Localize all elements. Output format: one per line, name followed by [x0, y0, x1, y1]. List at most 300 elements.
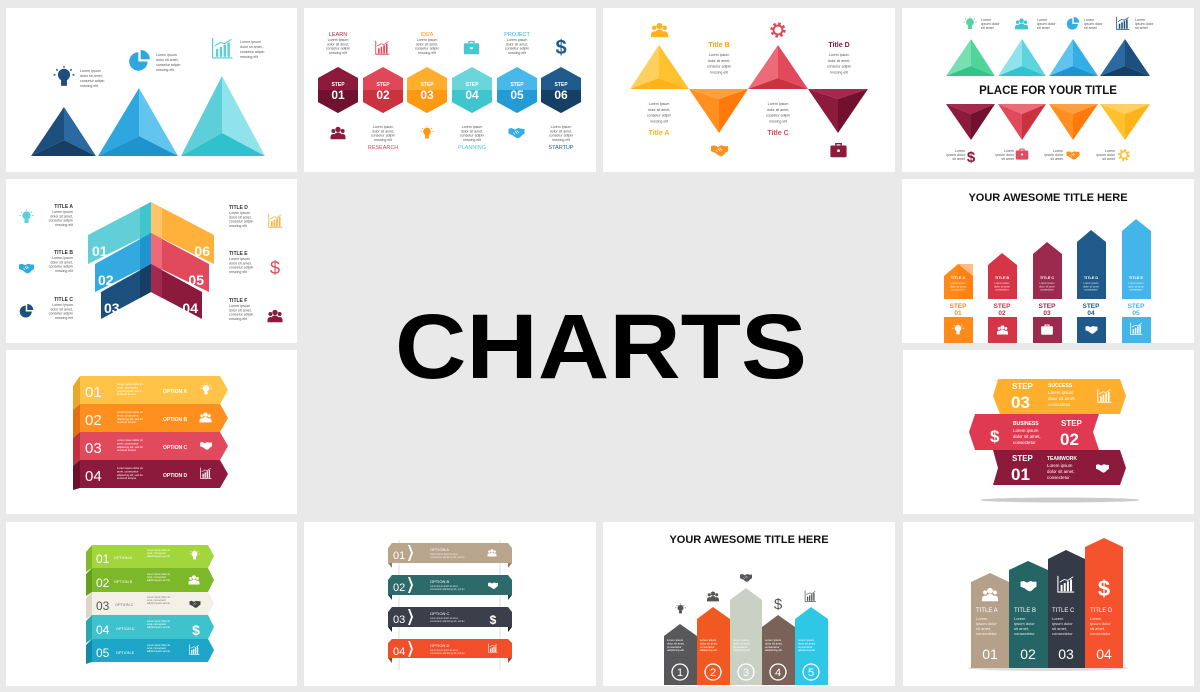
hexagon row: 04	[465, 88, 479, 102]
step labels: 03	[1043, 310, 1051, 317]
option 05	[86, 639, 214, 664]
right titles: dolor sit amet,	[229, 261, 252, 265]
top labels: nnscing elit	[508, 51, 526, 55]
icons: $	[270, 258, 280, 278]
band 03: OPTION C	[163, 445, 188, 451]
ribbon 02: $	[990, 427, 1000, 446]
text: chart caption: dolor sit amet,	[240, 45, 263, 49]
arrows: consectetur	[798, 645, 813, 649]
bottom labels	[368, 125, 574, 151]
panel: green options 01-05: adipiscing elit, sed do	[147, 555, 171, 558]
top icons row: ipsum dolor	[1135, 22, 1154, 26]
text: chart caption: consetur adipin	[240, 50, 264, 54]
top labels: PROJECT	[504, 32, 530, 38]
panel: ribbon options A-D: consectetur adipiscing elit, sed do	[430, 588, 465, 591]
band 01: 01	[85, 384, 102, 401]
hexagon row: STEP	[420, 82, 434, 88]
panel: green options 01-05: amet, consectetur	[147, 647, 166, 650]
arrows: 1	[677, 667, 683, 679]
chevron right	[151, 202, 214, 319]
triangle B	[689, 89, 748, 133]
title: YOUR AWESOME TITLE HERE	[968, 192, 1128, 204]
labels: Title C	[767, 130, 789, 137]
top icons row: ipsum dolor	[1084, 22, 1103, 26]
column 03: 03	[1058, 646, 1074, 662]
arrows: dolor sit amet	[1128, 284, 1144, 288]
arrows: TITLE C	[1040, 276, 1054, 280]
band 02: eiusmod tempor	[117, 420, 136, 424]
left titles: nnscing elit	[55, 269, 73, 273]
bottom icons row: Lorem	[1053, 149, 1063, 153]
chevron left	[88, 202, 151, 319]
band 02: OPTION B	[163, 417, 188, 423]
panel: green options 01-05: Lorem ipsum dolor sit	[147, 549, 170, 552]
bottom icons row: Lorem	[955, 149, 965, 153]
arrows: consectetur	[667, 645, 682, 649]
column 04: TITLE D	[1090, 608, 1113, 614]
column 02: TITLE B	[1014, 608, 1036, 614]
arrows: dolor sit amet,	[700, 641, 718, 645]
ribbon 04	[388, 639, 512, 663]
bottom labels: RESEARCH	[368, 145, 398, 151]
left titles: consetur adipin	[49, 312, 73, 316]
bottom icons row: ipsum dolor	[1096, 153, 1116, 157]
ribbon 03: 03	[393, 614, 405, 626]
top labels: LEARN	[329, 32, 347, 38]
chevron right: 05	[188, 272, 204, 288]
column 04: ipsum dolor	[1090, 621, 1111, 626]
bottom icons row	[946, 149, 1129, 166]
hexagon row: STEP	[331, 82, 345, 88]
panel: title columns 01-04	[903, 522, 1194, 686]
bottom labels: consetur adipin	[549, 134, 573, 138]
pyramid 1	[31, 107, 96, 156]
chevron right: 04	[182, 300, 198, 316]
text: pie caption: consetur adipin	[156, 63, 180, 67]
arrows: Lorem ipsum	[950, 281, 966, 285]
arrows: Lorem ipsum	[1084, 281, 1098, 285]
bottom labels: Lorem ipsum	[373, 125, 393, 129]
panel: green options 01-05: amet, consectetur	[147, 552, 166, 555]
ribbon 02: OPTION B	[430, 579, 449, 584]
right titles: Lorem ipsum	[229, 211, 250, 215]
top icons row	[963, 16, 1154, 30]
arrows: dolor sit amet,	[667, 641, 685, 645]
panel: stacked options A-D	[6, 350, 297, 514]
panel: zigzag triangles	[603, 8, 895, 172]
option 03: 03	[96, 599, 110, 613]
column 03: ipsum dolor	[1052, 621, 1073, 626]
lorem texts: dolor sit amet,	[708, 59, 730, 63]
ribbon 01: consectetur	[1047, 475, 1070, 480]
right titles: TITLE E	[229, 251, 248, 257]
arrows: dolor sit amet,	[733, 641, 751, 645]
column 01: Lorem	[976, 616, 988, 621]
lorem texts: Lorem ipsum	[829, 53, 849, 57]
ribbon 02: STEP	[1061, 419, 1083, 428]
vertical lines	[399, 540, 500, 670]
band 02: amet, consectetur	[117, 413, 138, 417]
band 03: eiusmod tempor	[117, 448, 136, 452]
top labels: Lorem ipsum	[507, 38, 527, 42]
arrows: 5	[808, 667, 814, 679]
bottom icons row: sit amet	[1102, 157, 1115, 161]
arrows: dolor sit amet,	[765, 641, 783, 645]
icon: pie	[129, 50, 150, 71]
arrows: consectetur	[995, 288, 1009, 292]
column 03	[1048, 550, 1085, 668]
top labels: nnscing elit	[418, 51, 436, 55]
option 04: 04	[96, 623, 110, 637]
ribbon 02	[969, 414, 1099, 450]
column 01: consectetur	[976, 631, 997, 636]
band 01: amet, consectetur	[117, 385, 138, 389]
column 01: TITLE A	[976, 608, 998, 614]
panel: green options 01-05: adipiscing elit, sed do	[147, 626, 171, 629]
band 02	[73, 404, 228, 438]
band 01	[73, 376, 228, 410]
ribbon 03: 03	[1011, 393, 1030, 412]
arrows: dolor sit amet	[994, 284, 1010, 288]
ribbon 01: Lorem ipsum	[1047, 463, 1073, 468]
text: pie caption: Lorem ipsum	[156, 53, 177, 57]
column 01: ipsum dolor	[976, 621, 997, 626]
bottom icons row: ipsum dolor	[946, 153, 966, 157]
triangle A	[630, 45, 689, 89]
arrows	[944, 219, 1151, 299]
ribbon 04: OPTION D	[430, 643, 449, 648]
arrows: adipiscing elit	[667, 648, 684, 652]
right titles: TITLE D	[229, 205, 248, 211]
chevron left: 03	[104, 300, 120, 316]
arrows: Lorem ipsum	[765, 638, 782, 642]
bottom icons row: Lorem	[1004, 149, 1014, 153]
text: pie caption: nnscing elit	[156, 68, 174, 72]
panel: ribbon options A-D: consectetur adipiscing elit, sed do	[430, 652, 465, 655]
title: PLACE FOR YOUR TITLE	[979, 85, 1117, 97]
top labels: Lorem ipsum	[417, 38, 437, 42]
band 02: Lorem ipsum dolor sit	[117, 410, 143, 414]
bottom labels: PLANNING	[458, 145, 486, 151]
pyramid 2	[98, 88, 178, 156]
band 03: Lorem ipsum dolor sit	[117, 438, 143, 442]
arrows: consectetur	[1084, 288, 1098, 292]
arrows	[664, 588, 828, 685]
arrows: dolor sit amet,	[798, 641, 816, 645]
icons above: $	[774, 596, 783, 613]
bottom labels: consetur adipin	[371, 134, 395, 138]
ribbon 02: Lorem ipsum	[1013, 428, 1039, 433]
panel: ribbon options A-D: consectetur adipiscing elit, sed do	[430, 620, 465, 623]
text: bulb caption: Lorem ipsum	[80, 69, 101, 73]
shadow	[968, 665, 1128, 671]
arrows: consectetur	[733, 645, 748, 649]
chevron left: 02	[98, 272, 114, 288]
column 03: sit amet,	[1052, 626, 1067, 631]
step labels: STEP	[1128, 303, 1145, 310]
panel: pyramids	[6, 8, 297, 172]
right titles: consetur adipin	[229, 220, 253, 224]
left titles: TITLE A	[54, 204, 73, 210]
ribbon 03: dolor sit amet,	[1048, 396, 1076, 401]
arrows: 2	[710, 667, 716, 679]
title: YOUR AWESOME TITLE HERE	[669, 534, 829, 546]
top labels: dolor sit amet,	[416, 42, 438, 46]
step labels: 04	[1087, 310, 1095, 317]
panel: ribbon options A-D: Lorem ipsum dolor sit amet,	[430, 553, 459, 556]
top labels: IDEA	[421, 32, 434, 38]
lorem texts: dolor sit amet,	[767, 108, 789, 112]
ribbon 03	[993, 379, 1126, 414]
ribbon 02: consectetur	[1013, 440, 1036, 445]
column 03: Lorem	[1052, 616, 1064, 621]
text: chart caption: Lorem ipsum	[240, 40, 261, 44]
top labels: consetur adipin	[505, 47, 529, 51]
step labels	[950, 303, 1145, 317]
panel: hexagon steps	[304, 8, 596, 172]
left titles: Lorem ipsum	[52, 256, 73, 260]
right titles: TITLE F	[229, 298, 247, 304]
option 01: 01	[96, 552, 110, 566]
panel: green options 01-05: adipiscing elit, sed do	[147, 650, 171, 653]
column 03: TITLE C	[1052, 608, 1075, 614]
text: bulb caption: consetur adipin	[80, 79, 104, 83]
top icons row: ipsum dolor	[1037, 22, 1056, 26]
ribbon 02: 02	[393, 582, 405, 594]
arrows: 3	[743, 667, 749, 679]
option 02	[86, 568, 214, 596]
arrows: Lorem ipsum	[994, 281, 1010, 285]
lorem texts: Lorem ipsum	[709, 53, 729, 57]
column 04: $	[1098, 576, 1110, 601]
bottom labels: nnscing elit	[374, 138, 392, 142]
panel: ribbon options A-D: Lorem ipsum dolor sit amet,	[430, 649, 459, 652]
text: bulb caption: dolor sit amet,	[80, 74, 103, 78]
ribbon 03: STEP	[1012, 382, 1034, 391]
arrows: Lorem ipsum	[798, 638, 815, 642]
ribbon 04: 04	[393, 646, 405, 658]
icon: chart	[213, 38, 232, 58]
arrows: consectetur	[1129, 288, 1143, 292]
top labels: Lorem ipsum	[328, 38, 348, 42]
arrows: Lorem ipsum	[667, 638, 684, 642]
labels: Title B	[708, 42, 730, 49]
top icons	[376, 37, 567, 59]
arrows: TITLE E	[1129, 276, 1144, 280]
panel: green options 01-05: adipiscing elit, sed do	[147, 579, 171, 582]
band 02: adipiscing elit, sed do	[117, 417, 143, 421]
hexagon row: 05	[510, 88, 524, 102]
right titles: Lorem ipsum	[229, 257, 250, 261]
top labels: dolor sit amet,	[506, 42, 528, 46]
labels: Title D	[828, 42, 850, 49]
panel: ribbon options A-D: Lorem ipsum dolor sit amet,	[430, 617, 459, 620]
arrows: adipiscing elit	[733, 648, 750, 652]
band 01: eiusmod tempor	[117, 392, 136, 396]
arrows: Lorem ipsum	[1128, 281, 1144, 285]
arrows: consectetur	[700, 645, 715, 649]
top icons row: sit amet	[1037, 26, 1050, 30]
step labels: 05	[1132, 310, 1140, 317]
panel: green options 01-05: Lorem ipsum dolor sit	[147, 644, 170, 647]
option 02: OPTION B	[114, 580, 133, 584]
arrows: consectetur	[765, 645, 780, 649]
left titles: dolor sit amet,	[50, 214, 73, 218]
option 03	[86, 592, 214, 619]
lorem texts: Lorem ipsum	[768, 102, 788, 106]
right titles: dolor sit amet,	[229, 215, 252, 219]
left titles: Lorem ipsum	[52, 210, 73, 214]
lorem texts	[647, 53, 851, 123]
right titles: Lorem ipsum	[229, 304, 250, 308]
ribbon 01	[388, 543, 512, 568]
band 04: Lorem ipsum dolor sit	[117, 466, 143, 470]
band 04: amet, consectetur	[117, 469, 138, 473]
step labels: STEP	[1039, 303, 1056, 310]
panel: step arrows chart	[902, 179, 1194, 343]
triangle C	[748, 45, 808, 89]
band 03: 03	[85, 440, 102, 457]
chevron left: 01	[92, 243, 108, 259]
bottom labels: dolor sit amet,	[550, 129, 572, 133]
bottom labels: nnscing elit	[552, 138, 570, 142]
panel: green options 01-05: Lorem ipsum dolor sit	[147, 573, 170, 576]
icons	[19, 210, 282, 322]
right titles	[229, 205, 253, 321]
column 04	[1085, 538, 1123, 668]
step labels: STEP	[994, 303, 1011, 310]
ribbon 01: STEP	[1012, 454, 1034, 463]
ribbon 02: 02	[1060, 430, 1079, 449]
ribbon 01	[993, 450, 1126, 485]
panel: ribbon options A-D: Lorem ipsum dolor sit amet,	[430, 585, 459, 588]
right titles: consetur adipin	[229, 313, 253, 317]
option 04: $	[192, 622, 200, 638]
top icons row: Lorem	[1135, 18, 1145, 22]
ribbon 03: Lorem ipsum	[1048, 390, 1074, 395]
panel: place for your title	[902, 8, 1194, 172]
ribbon 03: consectetur	[1048, 402, 1071, 407]
band 04: 04	[85, 468, 102, 485]
option 04: OPTION D	[116, 627, 135, 631]
option 01	[86, 545, 214, 572]
step labels: 02	[998, 310, 1006, 317]
bottom icons row: $	[967, 149, 976, 166]
top labels: consetur adipin	[415, 47, 439, 51]
panel: numbered arrows 1-5	[603, 522, 895, 686]
panel: green options 01-05: Lorem ipsum dolor sit	[147, 620, 170, 623]
ribbon 03	[388, 607, 512, 632]
bottom icons row: ipsum dolor	[1044, 153, 1064, 157]
shadow	[980, 498, 1140, 502]
hexagon row: STEP	[510, 82, 524, 88]
arrows: TITLE B	[995, 276, 1009, 280]
hexagon row: STEP	[554, 82, 568, 88]
lorem texts: consetur adipin	[827, 65, 851, 69]
band 04: adipiscing elit, sed do	[117, 473, 143, 477]
option 02: 02	[96, 576, 110, 590]
arrows: adipiscing elit	[798, 648, 815, 652]
text: bulb caption: nnscing elit	[80, 84, 98, 88]
arrows: TITLE A	[951, 276, 965, 280]
left titles: nnscing elit	[55, 223, 73, 227]
band 01: OPTION A	[163, 389, 187, 395]
left titles: nnscing elit	[55, 316, 73, 320]
option 05: OPTION E	[116, 651, 135, 655]
option 03: OPTION C	[115, 603, 134, 607]
bottom labels: dolor sit amet,	[461, 129, 483, 133]
lorem texts: nnscing elit	[710, 70, 728, 74]
column 04: sit amet,	[1090, 626, 1105, 631]
arrows: Lorem ipsum	[733, 638, 750, 642]
column 01: sit amet,	[976, 626, 991, 631]
lorem texts: dolor sit amet,	[648, 108, 670, 112]
hexagon row: STEP	[376, 82, 390, 88]
panel: green options 01-05	[6, 522, 297, 686]
bottom icons	[330, 126, 524, 139]
step labels: STEP	[1083, 303, 1100, 310]
column 04: Lorem	[1090, 616, 1102, 621]
hexagon row: 02	[376, 88, 390, 102]
panel: step ribbons 03-01	[903, 350, 1194, 514]
lorem texts: nnscing elit	[769, 119, 787, 123]
arrows: TITLE D	[1084, 276, 1098, 280]
lorem texts: consetur adipin	[766, 114, 790, 118]
lorem texts: nnscing elit	[830, 70, 848, 74]
right titles: nnscing elit	[229, 317, 247, 321]
text: pie caption: dolor sit amet,	[156, 58, 179, 62]
right titles: nnscing elit	[229, 224, 247, 228]
arrows: 4	[775, 667, 781, 679]
panel: green options 01-05: amet, consectetur	[147, 623, 166, 626]
icons	[651, 23, 847, 157]
lorem texts: consetur adipin	[647, 114, 671, 118]
panel: ribbon options A-D: consectetur adipiscing elit, sed do	[430, 556, 465, 559]
hexagon row	[318, 67, 581, 113]
arrows: consectetur	[1040, 288, 1054, 292]
band 01: adipiscing elit, sed do	[117, 389, 143, 393]
ribbon 03: SUCCESS	[1048, 383, 1073, 389]
top labels: dolor sit amet,	[327, 42, 349, 46]
bottom labels: STARTUP	[548, 145, 574, 151]
step labels: STEP	[950, 303, 967, 310]
lorem texts: dolor sit amet,	[828, 59, 850, 63]
panel: ribbon options A-D	[304, 522, 596, 686]
column 01	[971, 573, 1009, 668]
right titles: consetur adipin	[229, 266, 253, 270]
band 03: adipiscing elit, sed do	[117, 445, 143, 449]
bottom labels: nnscing elit	[463, 138, 481, 142]
arrows: consectetur	[951, 288, 965, 292]
arrows: adipiscing elit	[765, 648, 782, 652]
column 02: ipsum dolor	[1014, 621, 1035, 626]
left titles	[49, 204, 73, 320]
column 02: consectetur	[1014, 631, 1035, 636]
column 01: 01	[982, 646, 998, 662]
hexagon row: STEP	[465, 82, 479, 88]
left titles: consetur adipin	[49, 219, 73, 223]
icon squares	[944, 317, 1151, 343]
arrows: dolor sit amet	[1039, 284, 1055, 288]
panel: green options 01-05: adipiscing elit, sed do	[147, 602, 171, 605]
bottom icons row: ipsum dolor	[995, 153, 1015, 157]
left titles: Lorem ipsum	[52, 303, 73, 307]
top icons: $	[555, 37, 567, 59]
top icons row: ipsum dolor	[981, 22, 1000, 26]
top labels: consetur adipin	[326, 47, 350, 51]
option 04	[86, 615, 214, 643]
ribbon 03: OPTION C	[430, 611, 449, 616]
